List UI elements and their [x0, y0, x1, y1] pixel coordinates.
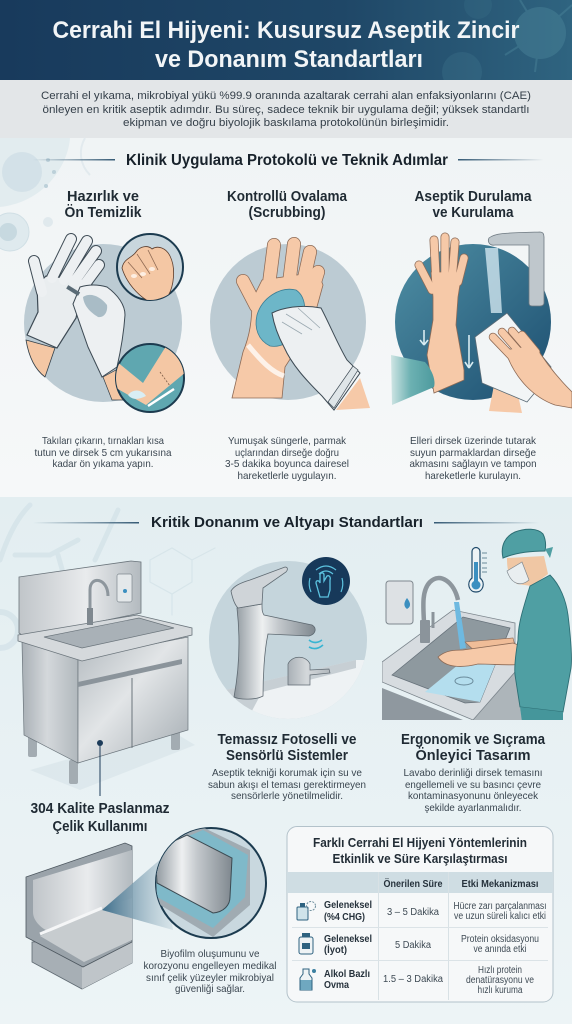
text: ergonomic description: Lavabo derinliği dirsek temasını: [404, 767, 542, 779]
heading: ergonomic design: Önleyici Tasarım: [416, 747, 530, 764]
panel: touchless sensor systems: [205, 557, 370, 802]
illustration: gloved hands: [24, 239, 182, 402]
heading: ergonomic design: Ergonomik ve Sıçrama: [401, 732, 546, 748]
section background: hardware standards: [0, 497, 572, 1024]
section heading: hardware standards: Kritik Donanım ve Altyapı Standartları: [151, 514, 423, 531]
title: Cerrahi El Hijyeni: Kusursuz Aseptik Zincir: [52, 17, 520, 44]
panel: step 1 preparation: [24, 189, 186, 470]
row: traditional iodine: (İyot): [324, 943, 347, 956]
intro text band: [0, 80, 572, 138]
illustration: steel corner block: [26, 843, 132, 989]
text: biofilm description: Biyofilm oluşumunu ve: [160, 948, 260, 960]
icon: decorative virus: [442, 0, 572, 92]
heading: Hazırlık ve Ön Temizlik: Ön Temizlik: [64, 204, 142, 221]
text: touchless description: Aseptik tekniği korumak için su ve: [212, 767, 362, 779]
panel: step 3 rinse and dry: [391, 189, 572, 482]
illustration: surgeon at sink: [382, 529, 571, 722]
row: traditional iodine: Geleneksel: [324, 933, 372, 945]
text: step 2 description: [225, 435, 349, 482]
icon: nails inset: [117, 234, 183, 302]
illustration: magnified cone: [102, 857, 173, 930]
text: ergonomic description: kontaminasyonunu önleyecek: [408, 790, 539, 802]
row: alcohol rub: Ovma: [324, 979, 349, 991]
text: step 3 description: suyun parmaklardan dirseğe: [410, 447, 536, 459]
icon: alcohol bottle: [300, 969, 316, 990]
row: traditional CHG: Hücre zarı parçalanması: [454, 901, 546, 912]
row: traditional iodine: Protein oksidasyonu: [461, 934, 539, 945]
text: step 1 description: Takıları çıkarın, tırnakları kısa: [42, 435, 164, 447]
title: [52, 17, 520, 73]
text: step 3 description: Elleri dirsek üzerinde tutarak: [410, 435, 537, 447]
row: traditional CHG: Geleneksel: [324, 899, 372, 911]
icon: magnified coating detail: [155, 826, 266, 938]
heading: touchless systems: Sensörlü Sistemler: [226, 748, 348, 764]
section heading: clinical protocol: Klinik Uygulama Protokolü ve Teknik Adımlar: [126, 152, 448, 169]
table title: [313, 836, 527, 866]
comparison table: [287, 826, 553, 1002]
text: biofilm description: sınıf çelik yüzeyler mikrobiyal: [146, 972, 274, 984]
text: step 1 description: [34, 435, 172, 470]
table header row: [287, 872, 553, 1000]
text: step 2 description: Yumuşak süngerle, parmak: [228, 435, 347, 447]
intro text band: önleyen en kritik aseptik adımdır. Bu süreç, sadece teknik bir uygulama değil; yüksek standartlı: [42, 104, 530, 116]
illustration: sponge on palm: [210, 244, 370, 410]
text: step 2 description: 3-5 dakika boyunca dairesel: [225, 458, 349, 470]
illustration: sink cabinet: [18, 561, 195, 790]
heading: ergonomic design: [401, 732, 546, 764]
icon: iodine bottle: [299, 933, 313, 954]
heading: Hazırlık ve Ön Temizlik: [64, 189, 142, 221]
icon: elbow inset: [116, 343, 186, 412]
text: touchless description: [208, 767, 366, 802]
text: biofilm description: [144, 948, 276, 995]
callout line and dot: [97, 740, 103, 796]
row: traditional CHG: ve uzun süreli kalıcı etki: [454, 911, 546, 922]
panel: stainless steel sink: [18, 561, 195, 835]
panel: ergonomic splash-proof design: [382, 529, 571, 814]
heading: touchless systems: Temassız Fotoselli ve: [218, 732, 356, 748]
panel: step 2 scrubbing: [210, 189, 370, 482]
row: alcohol rub: hızlı kuruma: [478, 985, 523, 996]
row: alcohol rub: Alkol Bazlı: [324, 968, 370, 980]
row: traditional CHG: (%4 CHG): [324, 911, 365, 923]
text: touchless description: sabun akışı el teması gerektirmeyen: [208, 779, 366, 791]
text: ergonomic description: engellemeli ve su basıncı çevre: [405, 779, 541, 791]
heading: Kontrollü Ovalama (Scrubbing): Kontrollü Ovalama: [227, 189, 348, 205]
panel: steel surface detail: [26, 826, 276, 995]
text: step 3 description: [410, 435, 537, 482]
text: touchless description: sensörlerle yönetilmelidir.: [231, 790, 343, 802]
heading: 304 steel: Çelik Kullanımı: [52, 819, 148, 835]
heading: 304 steel: 304 Kalite Paslanmaz: [30, 801, 170, 817]
heading: Aseptik Durulama ve Kurulama: Aseptik Durulama: [414, 189, 532, 205]
row: alcohol rub: [300, 965, 534, 996]
text: biofilm description: güvenliği sağlar.: [175, 983, 245, 995]
title: ve Donanım Standartları: [155, 46, 423, 73]
section background: clinical protocol: [0, 138, 572, 497]
illustration: sensor faucet: [209, 561, 367, 710]
heading: Kontrollü Ovalama (Scrubbing): (Scrubbing): [248, 205, 326, 221]
intro text band: Cerrahi el yıkama, mikrobiyal yükü %99.9 oranında azaltarak cerrahi alan enfaksiyonlarını (CAE): [41, 90, 531, 102]
text: step 1 description: kadar ön yıkama yapın.: [52, 458, 154, 470]
heading: 304 steel: [30, 801, 170, 835]
icon: touchless hand sensor: [302, 557, 350, 605]
table header row: Önerilen Süre: [384, 877, 443, 890]
intro text band: ekipman ve doğru biyolojik baskılama protokolünün birleşimidir.: [123, 117, 449, 129]
table title: Etkinlik ve Süre Karşılaştırması: [332, 852, 508, 866]
table header row: Etki Mekanizması: [462, 878, 539, 890]
heading: Kontrollü Ovalama (Scrubbing): [227, 189, 348, 221]
table title: Farklı Cerrahi El Hijyeni Yöntemlerinin: [313, 836, 527, 850]
row: traditional iodine: ve anında etki: [474, 944, 526, 955]
row: traditional CHG: [297, 899, 546, 923]
decoration: molecule background: [0, 505, 215, 648]
heading: Hazırlık ve Ön Temizlik: Hazırlık ve: [67, 189, 139, 205]
icon: CHG bottle: [297, 902, 316, 920]
text: step 3 description: akmasını sağlayın ve tampon: [410, 458, 537, 470]
text: ergonomic description: [404, 767, 542, 814]
decoration: petri cells: [0, 138, 90, 251]
row: alcohol rub: denatürasyonu ve: [466, 975, 534, 986]
row: alcohol rub: Hızlı protein: [478, 965, 522, 976]
text: step 2 description: hareketlerle uygulayın.: [238, 470, 336, 482]
row: alcohol rub: 1.5 – 3 Dakika: [383, 974, 443, 985]
text: ergonomic description: şekilde ayarlanmalıdır.: [424, 802, 522, 814]
row: traditional CHG: 3 – 5 Dakika: [387, 907, 439, 918]
text: biofilm description: korozyonu engelleyen medikal: [144, 960, 276, 972]
text: step 1 description: tutun ve dirsek 5 cm yukarısına: [34, 447, 172, 459]
heading: Aseptik Durulama ve Kurulama: ve Kurulama: [432, 205, 514, 221]
heading: touchless systems: [218, 732, 356, 764]
text: step 3 description: hareketlerle kurulayın.: [425, 470, 521, 482]
illustration: raised arm, faucet, towel: [391, 232, 572, 413]
heading: Aseptik Durulama ve Kurulama: [414, 189, 532, 221]
header banner: [0, 0, 572, 92]
row: traditional iodine: [299, 933, 539, 956]
row: traditional iodine: 5 Dakika: [395, 940, 431, 951]
text: step 2 description: uçlarından dirseğe doğru: [235, 447, 339, 459]
